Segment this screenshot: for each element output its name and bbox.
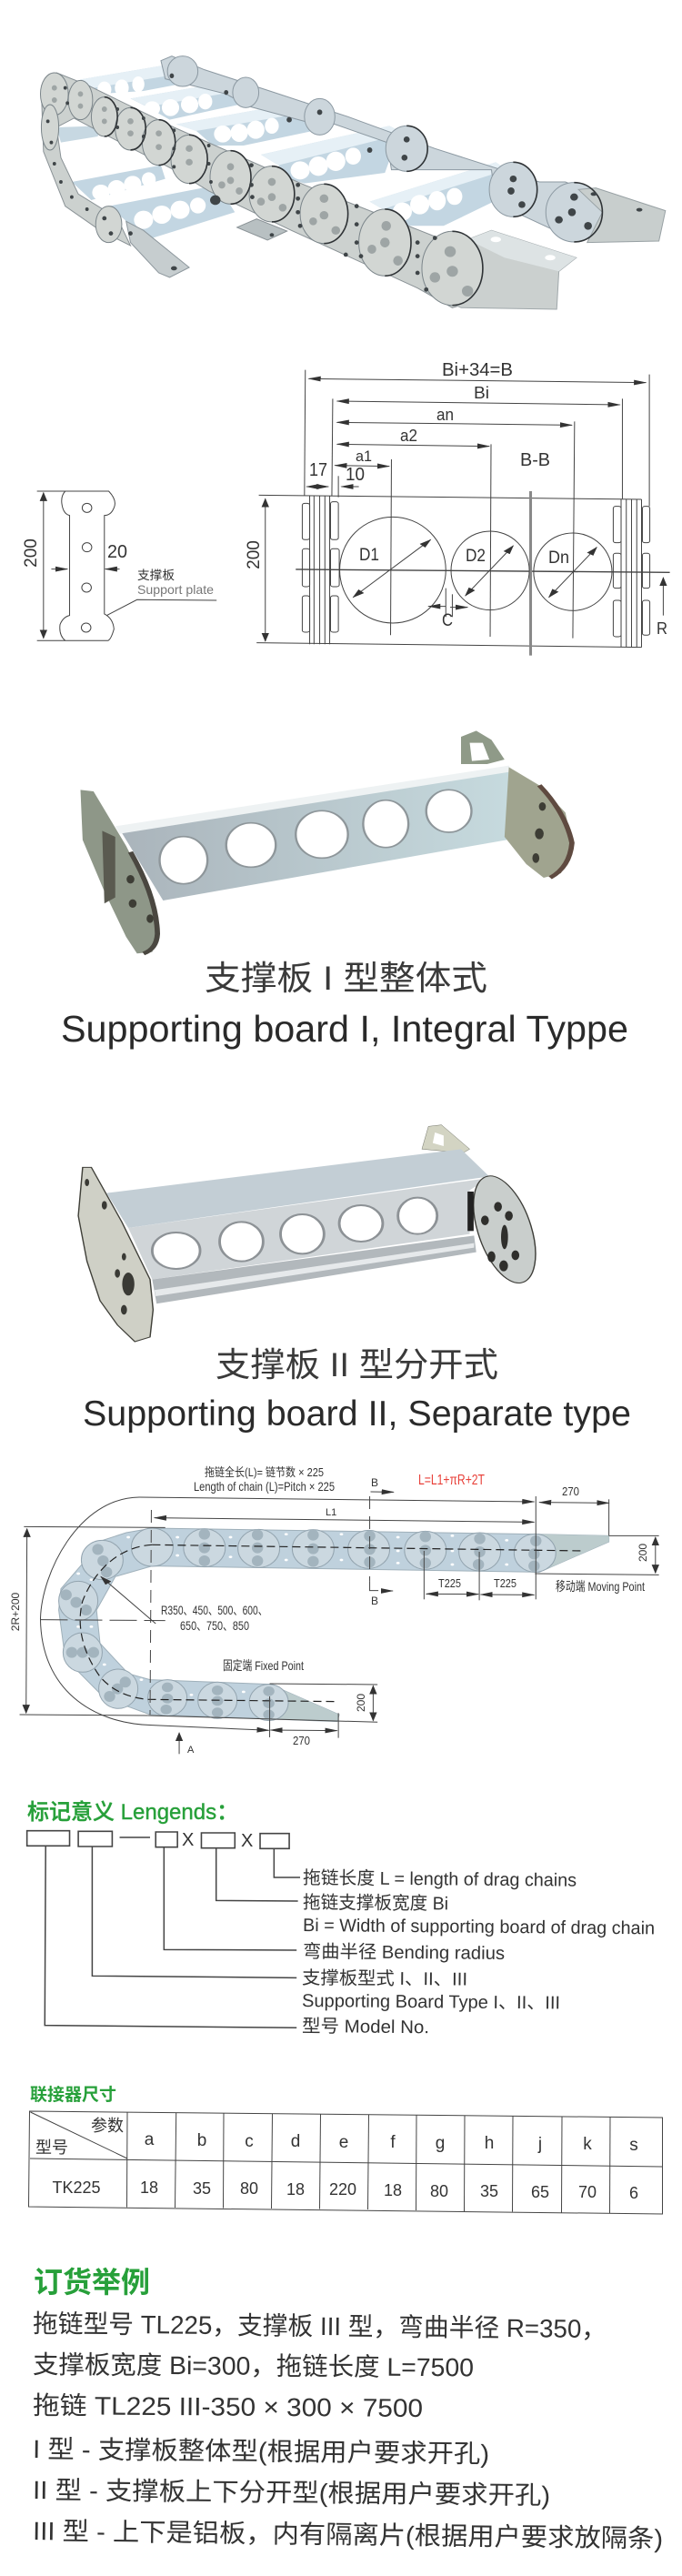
back side chain [161,56,602,242]
diagram labels: T225 [438,1576,461,1590]
table header row: f [390,2133,396,2152]
diagram labels: 650、750、850 [180,1618,249,1633]
dimension labels: 17 [309,460,327,480]
table value row: 6 [629,2184,638,2202]
table value row: 70 [578,2183,597,2201]
support plate label [137,569,214,597]
diagram: U-shaped drag chain with dimensions [9,1465,659,1756]
ordering example text [33,2309,663,2552]
caption: Supporting board II, Separate type: Supporting board II, Separate type [83,1394,631,1434]
dimension labels: 10 [346,465,365,485]
dimension labels: Bi [474,384,489,402]
legend text lines: 弯曲半径 Bending radius [303,1941,505,1964]
dimension labels: an [436,406,454,424]
table header row [35,2117,638,2157]
diagram labels: 270 [562,1484,579,1498]
table value row: 18 [286,2180,305,2199]
small centre bracket [237,219,287,240]
legend text lines: 拖链长度 L = length of drag chains [303,1867,577,1891]
diagram labels: 270 [293,1734,310,1747]
diagram labels: T225 [494,1576,517,1590]
heading: 订货举例: 订货举例 [34,2266,150,2299]
drawing: B-B cross-section with holes [245,360,670,656]
left and right end stacks [309,496,311,644]
table header row: b [197,2131,206,2150]
table value row [52,2179,638,2202]
front mount bracket [424,230,577,309]
diagram labels [9,1465,649,1756]
holes [92,76,462,229]
table header row: 型号 [35,2138,68,2157]
dimension labels: C [442,611,453,630]
multiply signs [182,1830,253,1851]
ordering example text: I 型 - 支撑板整体型(根据用户要求开孔) [33,2435,489,2468]
legend text lines: Bi = Width of supporting board of drag chain [303,1916,655,1938]
rivets [60,1529,541,1719]
ordering example text: 支撑板宽度 Bi=300，拖链长度 L=7500 [33,2350,474,2381]
dimension labels: a1 [356,448,372,465]
diagram labels: B [371,1476,378,1489]
table header row: 参数 [91,2117,124,2135]
table header row: s [629,2136,638,2155]
dashed centre lines [152,1545,583,1551]
legend text lines: 型号 Model No. [302,2016,429,2038]
legend text lines: Supporting Board Type I、II、III [302,1991,560,2013]
photo: supporting board type I [80,730,572,953]
diagram labels: 200 [637,1544,649,1562]
table header row: j [537,2135,542,2154]
table header row: h [485,2134,494,2153]
dimension labels: a2 [400,427,417,445]
ordering example text: III 型 - 上下是铝板，内有隔离片(根据用户要求放隔条) [33,2517,663,2552]
ordering example text: 拖链型号 TL225，支撑板 III 型，弯曲半径 R=350， [33,2309,607,2343]
legend: model code boxes and leader lines [27,1830,300,2028]
back mount bracket [578,188,666,243]
disc rivets [52,86,473,297]
table: connector dimensions [29,2111,662,2214]
dimension lines [539,1502,609,1504]
legend text lines: 拖链支撑板宽度 Bi [303,1892,448,1914]
multiply signs: X [241,1831,253,1851]
dimension labels: Dn [548,548,569,568]
left mount foot [126,221,189,277]
diagram labels: A [187,1745,195,1756]
legend text lines: 支撑板型式 I、II、III [302,1967,467,1990]
caption: 支撑板 I 型整体式: 支撑板 I 型整体式 [205,960,487,997]
dimension labels: D1 [359,546,379,565]
dimension labels: R [657,619,667,638]
diagram labels: Length of chain (L)=Pitch × 225 [194,1479,335,1494]
diagram labels: 固定端 Fixed Point [223,1658,304,1673]
table value row: TK225 [52,2179,101,2197]
table header row: e [339,2133,348,2152]
table value row: 80 [430,2182,448,2200]
front discs [40,73,483,306]
outer cable route [40,1497,534,1730]
dimension labels: Bi+34=B [442,360,513,380]
diagram labels: 200 [355,1694,367,1712]
dark disc edges [105,97,602,306]
chain body [59,1528,609,1722]
crossbars [56,62,506,239]
ordering example text: II 型 - 支撑板上下分开型(根据用户要求开孔) [33,2476,550,2510]
table value row: 65 [531,2183,549,2201]
table value row: 220 [329,2180,356,2199]
table header row: a [145,2130,155,2149]
table value row: 35 [480,2182,498,2200]
back rivets and band dots [46,74,642,292]
dimension labels [245,360,667,638]
photo: steel drag chain assembly [40,56,666,309]
perforation dots [76,1533,508,1696]
heading: 联接器尺寸: 联接器尺寸 [30,2085,116,2105]
table header row: c [245,2132,254,2151]
photo: supporting board type II [78,1125,547,1342]
dimension labels: 200 [245,540,264,569]
drawing: support plate section [22,491,216,640]
table header row: d [291,2132,300,2151]
front side chain band [41,73,483,307]
diagram labels: L=L1+πR+2T [418,1473,485,1488]
legend text lines [302,1867,655,2038]
table value row: 18 [384,2181,402,2199]
holes [340,517,446,623]
diagram labels: B [371,1595,378,1607]
link discs [59,1528,556,1721]
diagram labels: 拖链全长(L)= 链节数 × 225 [205,1465,324,1479]
dimension labels: D2 [466,547,486,566]
dimension labels: B-B [520,450,550,470]
heading: 标记意义 Lengends: 标记意义 Lengends： [27,1800,238,1825]
dimension 20: 20 [107,542,127,562]
support plate label: Support plate [137,582,214,597]
dimension 200: 200 [22,538,41,568]
diagram labels: 移动端 Moving Point [556,1579,645,1594]
table value row: 80 [240,2179,258,2198]
ordering example text: 拖链 TL225 III-350 × 300 × 7500 [33,2391,423,2422]
support plate label: 支撑板 [137,569,176,582]
caption: Supporting board I, Integral Typpe: Supporting board I, Integral Typpe [61,1008,628,1050]
caption: 支撑板 II 型分开式: 支撑板 II 型分开式 [216,1346,498,1384]
table header row: k [583,2135,592,2154]
table value row: 35 [193,2179,211,2198]
multiply signs: X [182,1830,194,1850]
diagram labels: 2R+200 [9,1592,22,1631]
table header row: g [436,2134,445,2153]
table value row: 18 [140,2179,158,2197]
diagram labels: L1 [326,1507,336,1518]
diagram labels: R350、450、500、600、 [161,1603,267,1617]
